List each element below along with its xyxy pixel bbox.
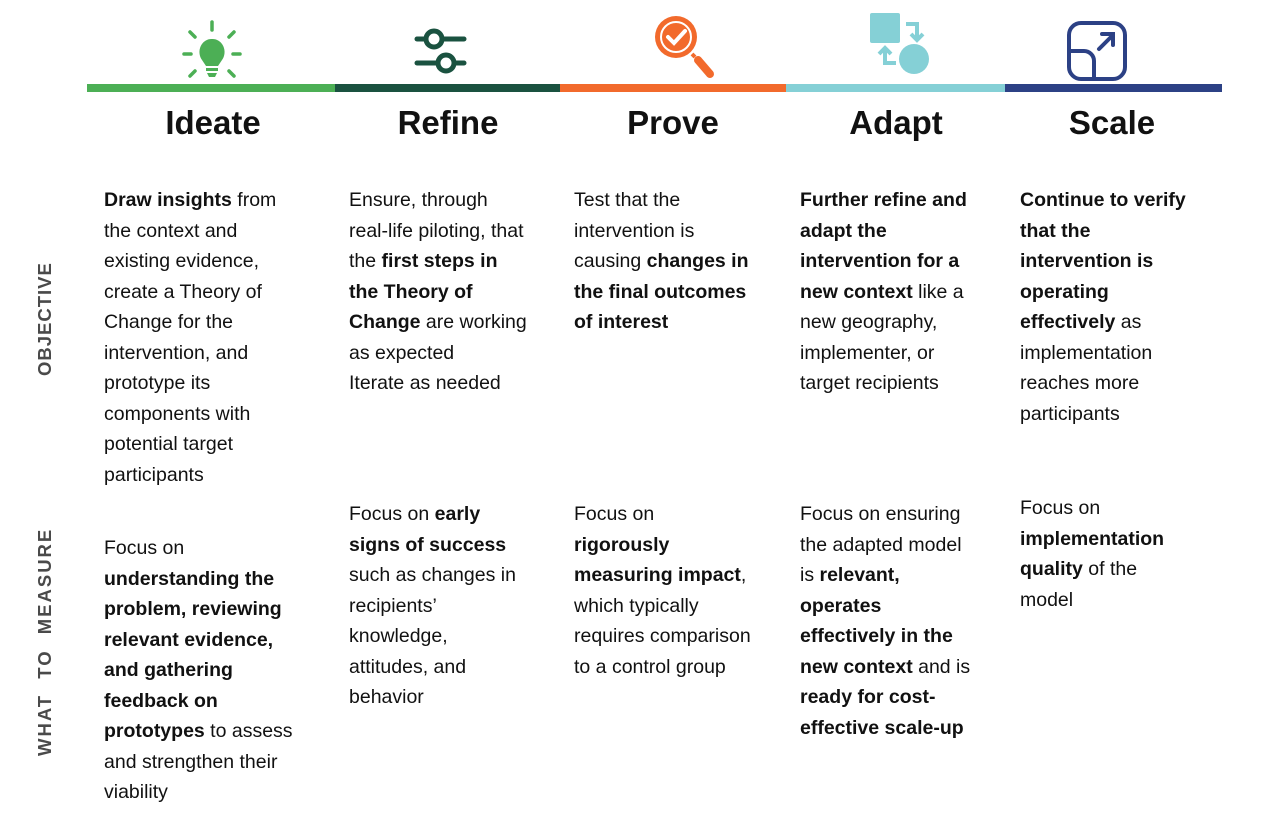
objective: adapt: new context like a [800, 280, 964, 302]
measure: ideate [104, 537, 293, 803]
measure: scale: model [1020, 588, 1073, 610]
measure: ideate: understanding the [104, 568, 274, 590]
measure: adapt: is relevant, [800, 564, 900, 586]
measure: adapt: ready for cost- [800, 686, 935, 708]
measure: scale: quality of the [1020, 558, 1137, 580]
objective: scale: Continue to verify [1020, 189, 1186, 211]
objective: scale: effectively as [1020, 311, 1141, 333]
measure: ideate: prototypes to assess [104, 720, 293, 742]
objective: prove: the final outcomes [574, 280, 746, 302]
icon: adapt shapes [870, 13, 929, 74]
objective: refine [349, 189, 527, 394]
objective: scale: implementation [1020, 342, 1152, 364]
measure: refine: Focus on early [349, 503, 480, 525]
objective: refine: real-life piloting, that [349, 220, 524, 242]
side label: what to measure: WHAT TO MEASURE [34, 528, 55, 756]
measure: adapt: new context and is [800, 656, 970, 678]
objective: adapt [800, 189, 967, 394]
measure: prove: rigorously [574, 534, 669, 556]
measure: refine: attitudes, and [349, 656, 466, 678]
icon: scale box [1067, 21, 1127, 81]
objective: refine: as expected [349, 342, 454, 364]
measure: adapt: effectively in the [800, 625, 953, 647]
measure: refine: signs of success [349, 534, 506, 556]
title: Prove: Prove [627, 104, 719, 141]
icon: lightbulb [182, 20, 242, 78]
measure: ideate: and strengthen their [104, 750, 277, 772]
measure: scale: implementation [1020, 528, 1164, 550]
objective: refine: the Theory of [349, 280, 473, 302]
measure: adapt [800, 503, 970, 738]
objective: refine: the first steps in [349, 250, 497, 272]
measure: ideate: and gathering [104, 659, 233, 681]
objective: prove: Test that the [574, 189, 680, 211]
measure: prove [574, 503, 751, 678]
measure: adapt: operates [800, 594, 881, 616]
objective: adapt: adapt the [800, 220, 887, 242]
objective: scale: intervention is [1020, 250, 1153, 272]
measure: refine: such as changes in [349, 564, 516, 586]
icon: sliders [414, 28, 466, 74]
color bars [87, 84, 1222, 92]
objective: prove: causing changes in [574, 250, 749, 272]
objective: ideate: participants [104, 464, 204, 486]
objective: ideate: intervention, and [104, 342, 248, 364]
measure: scale [1020, 497, 1164, 610]
measure: prove: Focus on [574, 503, 654, 525]
objective: ideate: the context and [104, 220, 237, 242]
objective: refine: Ensure, through [349, 189, 488, 211]
objective: scale [1020, 189, 1186, 424]
measure: ideate: Focus on [104, 537, 184, 559]
objective: ideate: components with [104, 402, 250, 424]
objective: prove [574, 189, 749, 333]
objective: adapt: implementer, or [800, 342, 934, 364]
measure: refine: knowledge, [349, 625, 448, 647]
objective: refine: Change are working [349, 311, 527, 333]
measure: ideate: viability [104, 781, 168, 803]
objective: adapt: new geography, [800, 311, 937, 333]
measure: prove: measuring impact, [574, 564, 746, 586]
title: Refine: Refine [398, 104, 498, 141]
objective: adapt: intervention for a [800, 250, 959, 272]
measure: scale: Focus on [1020, 497, 1100, 519]
objective: scale: that the [1020, 220, 1090, 242]
objective: prove: of interest [574, 311, 668, 333]
title: Adapt: Adapt [849, 104, 943, 141]
measure: prove: which typically [574, 594, 699, 616]
measure: prove: to a control group [574, 656, 726, 678]
objective: prove: intervention is [574, 220, 694, 242]
measure: adapt: Focus on ensuring [800, 503, 960, 525]
title: Ideate: Ideate [165, 104, 261, 141]
objective: scale: operating [1020, 280, 1109, 302]
objective: scale: participants [1020, 402, 1120, 424]
objective: ideate [104, 189, 276, 486]
objective: ideate: prototype its [104, 372, 210, 394]
measure: refine: recipients’ [349, 594, 437, 616]
objective: refine: Iterate as needed [349, 372, 501, 394]
side label: objective: OBJECTIVE [34, 262, 55, 376]
objective: adapt: target recipients [800, 372, 939, 394]
title: Scale: Scale [1069, 104, 1155, 141]
objective: ideate: Draw insights from [104, 189, 276, 211]
objective: ideate: potential target [104, 433, 233, 455]
measure: refine [349, 503, 516, 708]
icon: magnifier check [655, 16, 714, 78]
measure: ideate: problem, reviewing [104, 598, 282, 620]
measure: ideate: feedback on [104, 690, 218, 712]
objective: ideate: existing evidence, [104, 250, 259, 272]
objective: ideate: Change for the [104, 311, 233, 333]
objective: ideate: create a Theory of [104, 280, 262, 302]
measure: prove: requires comparison [574, 625, 751, 647]
objective: scale: reaches more [1020, 372, 1139, 394]
measure: ideate: relevant evidence, [104, 628, 273, 650]
measure: refine: behavior [349, 686, 424, 708]
measure: adapt: effective scale-up [800, 716, 964, 738]
objective: adapt: Further refine and [800, 189, 967, 211]
measure: adapt: the adapted model [800, 534, 962, 556]
